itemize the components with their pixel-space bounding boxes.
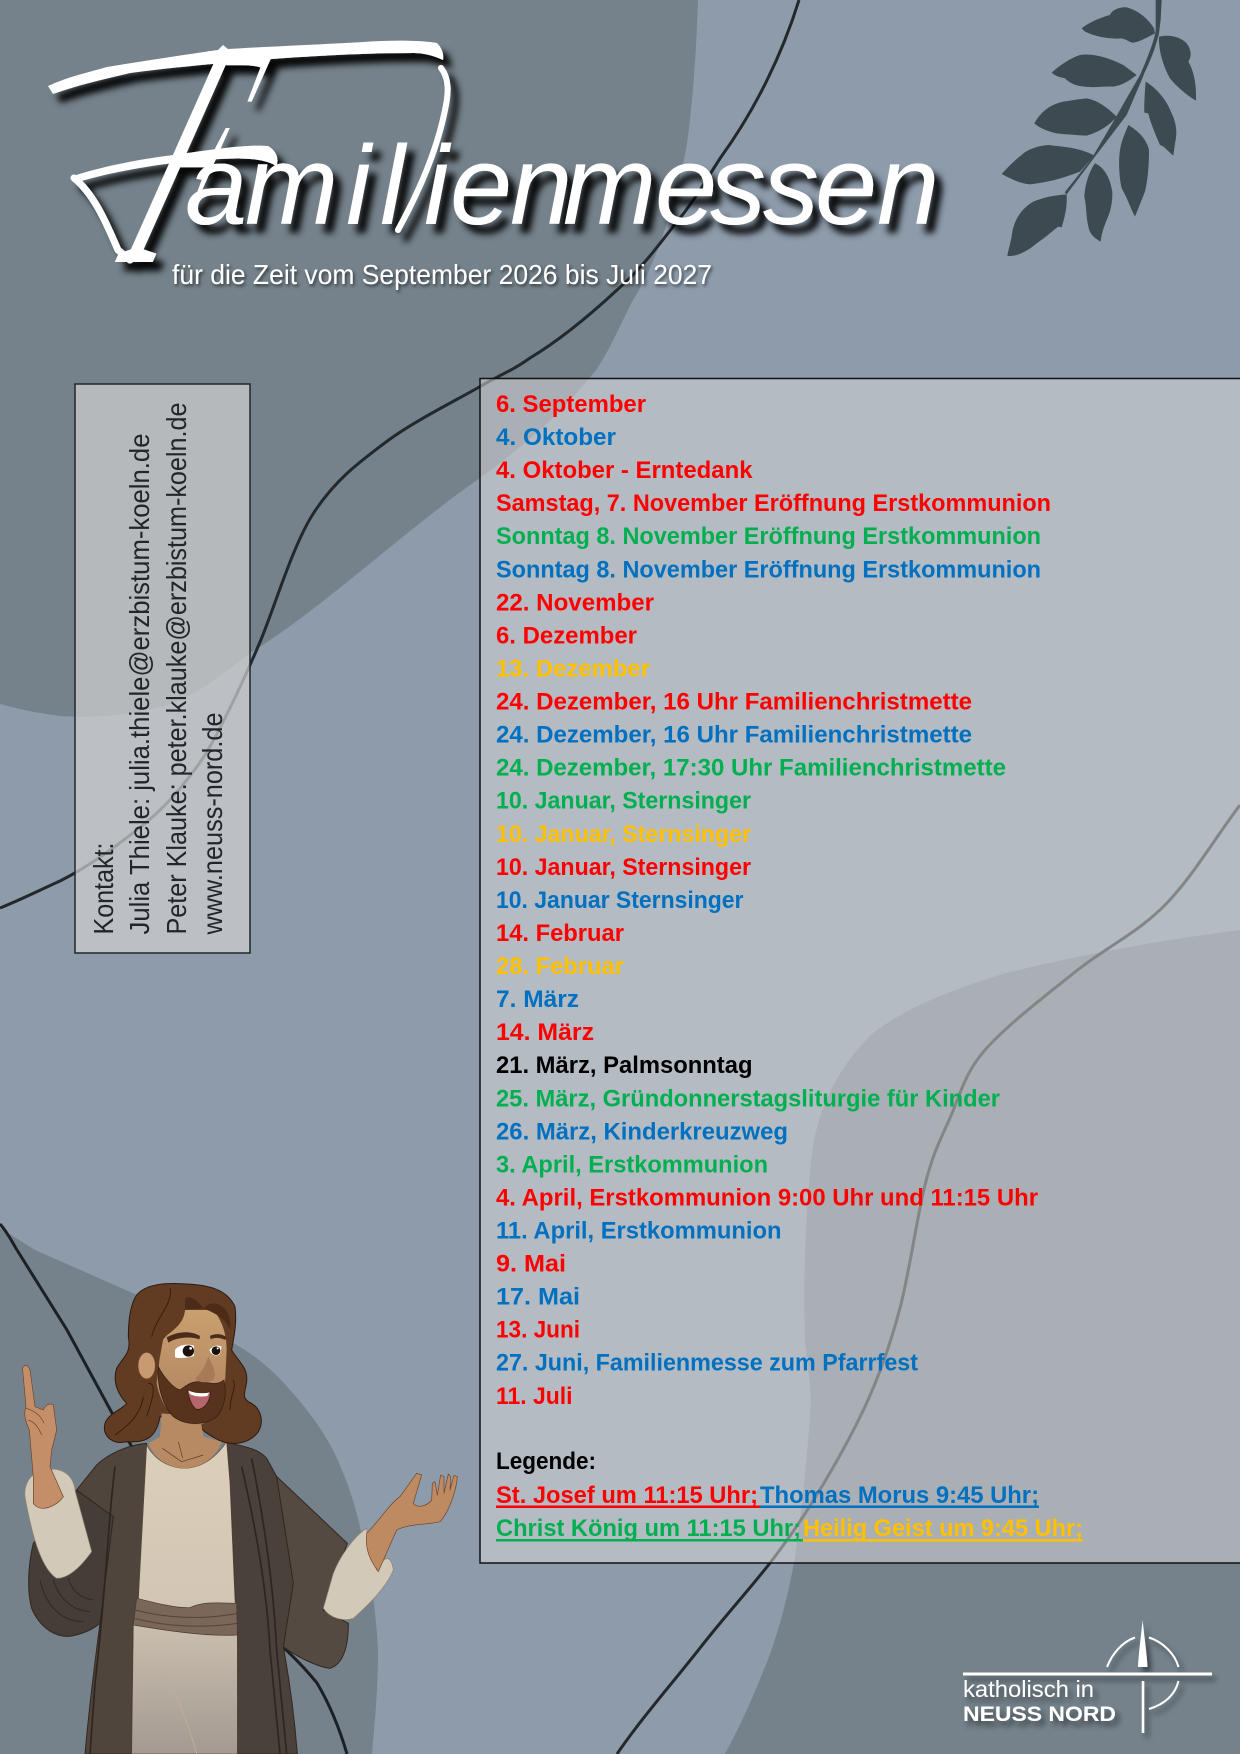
schedule dates list: 10. Januar, Sternsinger: [496, 788, 751, 815]
schedule dates list: 17. Mai: [496, 1284, 580, 1311]
schedule dates list: 6. Dezember: [496, 622, 637, 649]
schedule dates list: Sonntag 8. November Eröffnung Erstkommunion: [496, 523, 1041, 550]
legend: Christ König um 11:15 Uhr;: [496, 1515, 801, 1542]
eyes: [175, 1345, 194, 1358]
title: [48, 0, 939, 332]
schedule dates list: 4. April, Erstkommunion 9:00 Uhr und 11:15 Uhr: [496, 1184, 1038, 1211]
schedule dates list: 22. November: [496, 589, 654, 616]
mouth: [187, 1391, 211, 1409]
legend: [496, 1448, 1083, 1542]
schedule dates list: Samstag, 7. November Eröffnung Erstkommunion: [496, 490, 1051, 517]
sash: [133, 1598, 237, 1635]
schedule dates list: 25. März, Gründonnerstagsliturgie für Kinder: [496, 1085, 1000, 1112]
ear: [138, 1352, 155, 1379]
title flourish: long downstroke: [398, 68, 448, 230]
schedule dates list: 13. Juni: [496, 1317, 580, 1344]
right hand: [366, 1473, 457, 1572]
eyebrows: [167, 1332, 227, 1343]
schedule dates list: 4. Oktober: [496, 424, 616, 451]
schedule dates list: Sonntag 8. November Eröffnung Erstkommunion: [496, 556, 1041, 583]
schedule dates list: 9. Mai: [496, 1251, 566, 1278]
face: [157, 1310, 227, 1425]
robe body: [77, 1443, 147, 1754]
title letters: amilienmessen: [185, 123, 939, 248]
beard: [158, 1367, 225, 1424]
curved line: bottom left: [0, 1224, 347, 1754]
schedule dates list: 14. Februar: [496, 920, 624, 947]
contact text: Kontakt:: [88, 842, 119, 934]
schedule dates list: 21. März, Palmsonntag: [496, 1052, 752, 1079]
schedule dates list: 4. Oktober - Erntedank: [496, 457, 753, 484]
schedule dates list: 11. Juli: [496, 1383, 572, 1410]
contact text: Peter Klauke: peter.klauke@erzbistum-koeln.de: [161, 402, 192, 934]
legend: Heilig Geist um 9:45 Uhr;: [803, 1515, 1083, 1542]
schedule dates list: 10. Januar, Sternsinger: [496, 821, 751, 848]
schedule dates list: 10. Januar Sternsinger: [496, 887, 744, 914]
schedule dates list: 13. Dezember: [496, 656, 650, 682]
logo: katholisch in Neuss Nord: NEUSS NORD: [963, 1702, 1116, 1726]
schedule dates list: 24. Dezember, 17:30 Uhr Familienchristmette: [496, 755, 1006, 782]
schedule dates list: 10. Januar, Sternsinger: [496, 854, 751, 881]
contact text: Julia Thiele: julia.thiele@erzbistum-koeln.de: [124, 434, 155, 934]
curved line: top: [0, 0, 799, 908]
neck: [148, 1413, 222, 1468]
subtitle: für die Zeit vom September 2026 bis Juli 2027: [172, 259, 712, 290]
illustration: Jesus figure: [23, 1284, 457, 1754]
contact text: [88, 402, 228, 935]
title flourish: crossbar: [73, 146, 278, 182]
schedule dates list: 6. September: [496, 391, 646, 418]
legend: St. Josef um 11:15 Uhr;: [496, 1482, 758, 1509]
right cuff: [323, 1528, 393, 1620]
legend: Thomas Morus 9:45 Uhr;: [760, 1482, 1039, 1509]
schedule dates list: 24. Dezember, 16 Uhr Familienchristmette: [496, 688, 972, 716]
left cuff: [25, 1469, 92, 1578]
schedule dates list: 24. Dezember, 16 Uhr Familienchristmette: [496, 722, 972, 749]
left hand: [23, 1366, 63, 1508]
logo: katholisch in Neuss Nord: [963, 1620, 1212, 1733]
robe right sleeve: [267, 1473, 348, 1668]
curved line: right: [617, 805, 1240, 1754]
schedule dates list: 28. Februar: [496, 953, 624, 980]
schedule dates list: [496, 391, 1051, 1410]
schedule dates list: 27. Juni, Familienmesse zum Pfarrfest: [496, 1350, 918, 1377]
schedule dates list: 26. März, Kinderkreuzweg: [496, 1118, 788, 1145]
contact text: www.neuss-nord.de: [197, 712, 228, 935]
title flourish: top stroke: [48, 41, 443, 94]
logo: katholisch in Neuss Nord: katholisch in: [963, 1676, 1094, 1702]
background blob: top left: [0, 0, 698, 717]
robe left sleeve: [29, 1490, 113, 1636]
nose: [195, 1357, 215, 1382]
tunic fold: [158, 1667, 197, 1754]
schedule dates list: 11. April, Erstkommunion: [496, 1218, 782, 1244]
legend: Legende:: [496, 1448, 596, 1475]
hair: [104, 1284, 261, 1443]
tunic: [132, 1442, 237, 1754]
panel: schedule: [480, 378, 1240, 1563]
schedule dates list: 3. April, Erstkommunion: [496, 1151, 768, 1178]
schedule dates list: 7. März: [496, 986, 579, 1013]
schedule dates list: 14. März: [496, 1019, 594, 1046]
hair fringe: [184, 1297, 230, 1330]
background blob: bottom right: [725, 930, 1240, 1754]
title flourish: left triangle: [74, 178, 130, 260]
panel: contact: [75, 384, 250, 953]
icon: leaf branch: [1002, 0, 1196, 256]
background blob: bottom left: [0, 1228, 378, 1754]
